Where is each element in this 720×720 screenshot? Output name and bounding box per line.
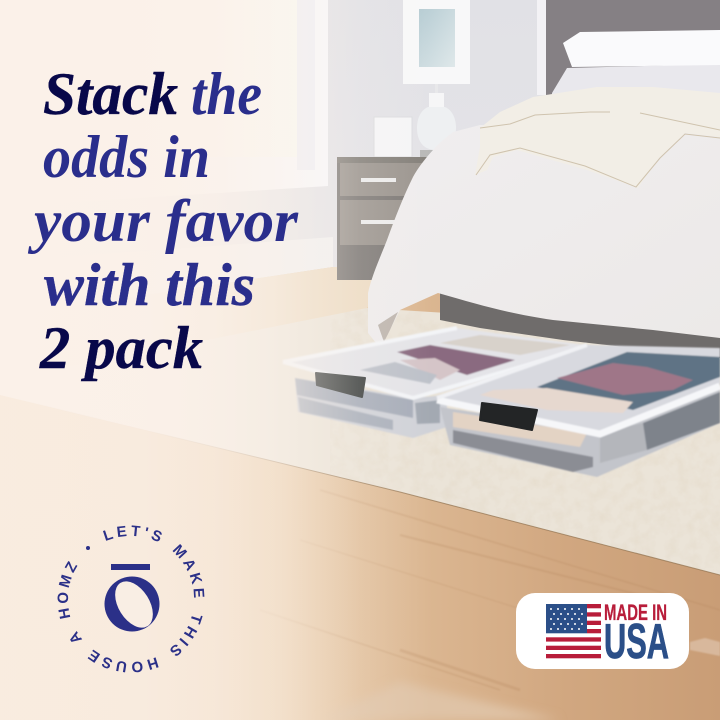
line: your favor: your favor	[28, 188, 299, 254]
window	[0, 0, 328, 207]
logo badge: Homz	[58, 525, 204, 672]
word: Stack: Stack	[43, 61, 178, 127]
storage box: left	[283, 328, 600, 438]
latch: right	[480, 403, 537, 430]
purple cloth	[397, 345, 515, 375]
lid rim	[283, 328, 590, 398]
throw blanket	[475, 87, 720, 188]
wall art	[403, 0, 470, 84]
rug	[208, 308, 720, 576]
bed base	[440, 293, 720, 358]
grey cloth	[360, 362, 437, 384]
USA: USA	[604, 615, 669, 669]
line: odds in: odds in	[43, 124, 210, 190]
lamp	[417, 84, 456, 158]
storage box: right	[437, 345, 720, 477]
blue cloth	[537, 352, 720, 410]
lid	[283, 328, 600, 398]
folded clothes	[295, 378, 413, 418]
cream stack	[453, 412, 587, 447]
headboard	[546, 0, 720, 95]
duvet	[368, 125, 720, 343]
circular text: LET'S MAKE THIS HOUSE A HOMZ	[58, 525, 204, 672]
light plank	[320, 682, 560, 720]
photo: bedroom scene	[162, 0, 720, 720]
floor tint	[0, 395, 400, 720]
wall	[0, 0, 720, 320]
flag	[546, 604, 601, 658]
badge: Made in USA	[516, 593, 689, 669]
latch: left	[316, 373, 365, 397]
headline	[28, 61, 299, 381]
skirting board	[0, 237, 333, 317]
ring dot	[86, 546, 90, 550]
box body	[440, 380, 720, 477]
line: with this: with this	[44, 252, 255, 318]
nightstand	[337, 157, 427, 280]
pink cloth	[400, 358, 460, 380]
lid rim	[437, 386, 720, 434]
logo o	[104, 575, 161, 634]
side clothes	[600, 423, 647, 463]
line: 2 pack: 2 pack	[39, 315, 203, 381]
badge background	[516, 593, 689, 669]
floor reflection	[690, 638, 720, 656]
Made in: MADE IN	[604, 600, 667, 625]
grey stack	[453, 430, 593, 472]
floor grain	[260, 490, 720, 690]
pillows	[552, 30, 720, 100]
picture frame	[374, 117, 412, 157]
word: the: the	[191, 61, 262, 127]
beige cloth	[440, 335, 570, 355]
cream cloth	[480, 388, 633, 413]
box body	[295, 378, 447, 438]
lid	[437, 345, 720, 432]
wood floor	[0, 267, 720, 720]
pink cloth	[557, 363, 693, 395]
pale floor behind rug	[0, 267, 385, 381]
duvet tail shadow	[378, 312, 398, 342]
logo bar	[111, 564, 150, 570]
